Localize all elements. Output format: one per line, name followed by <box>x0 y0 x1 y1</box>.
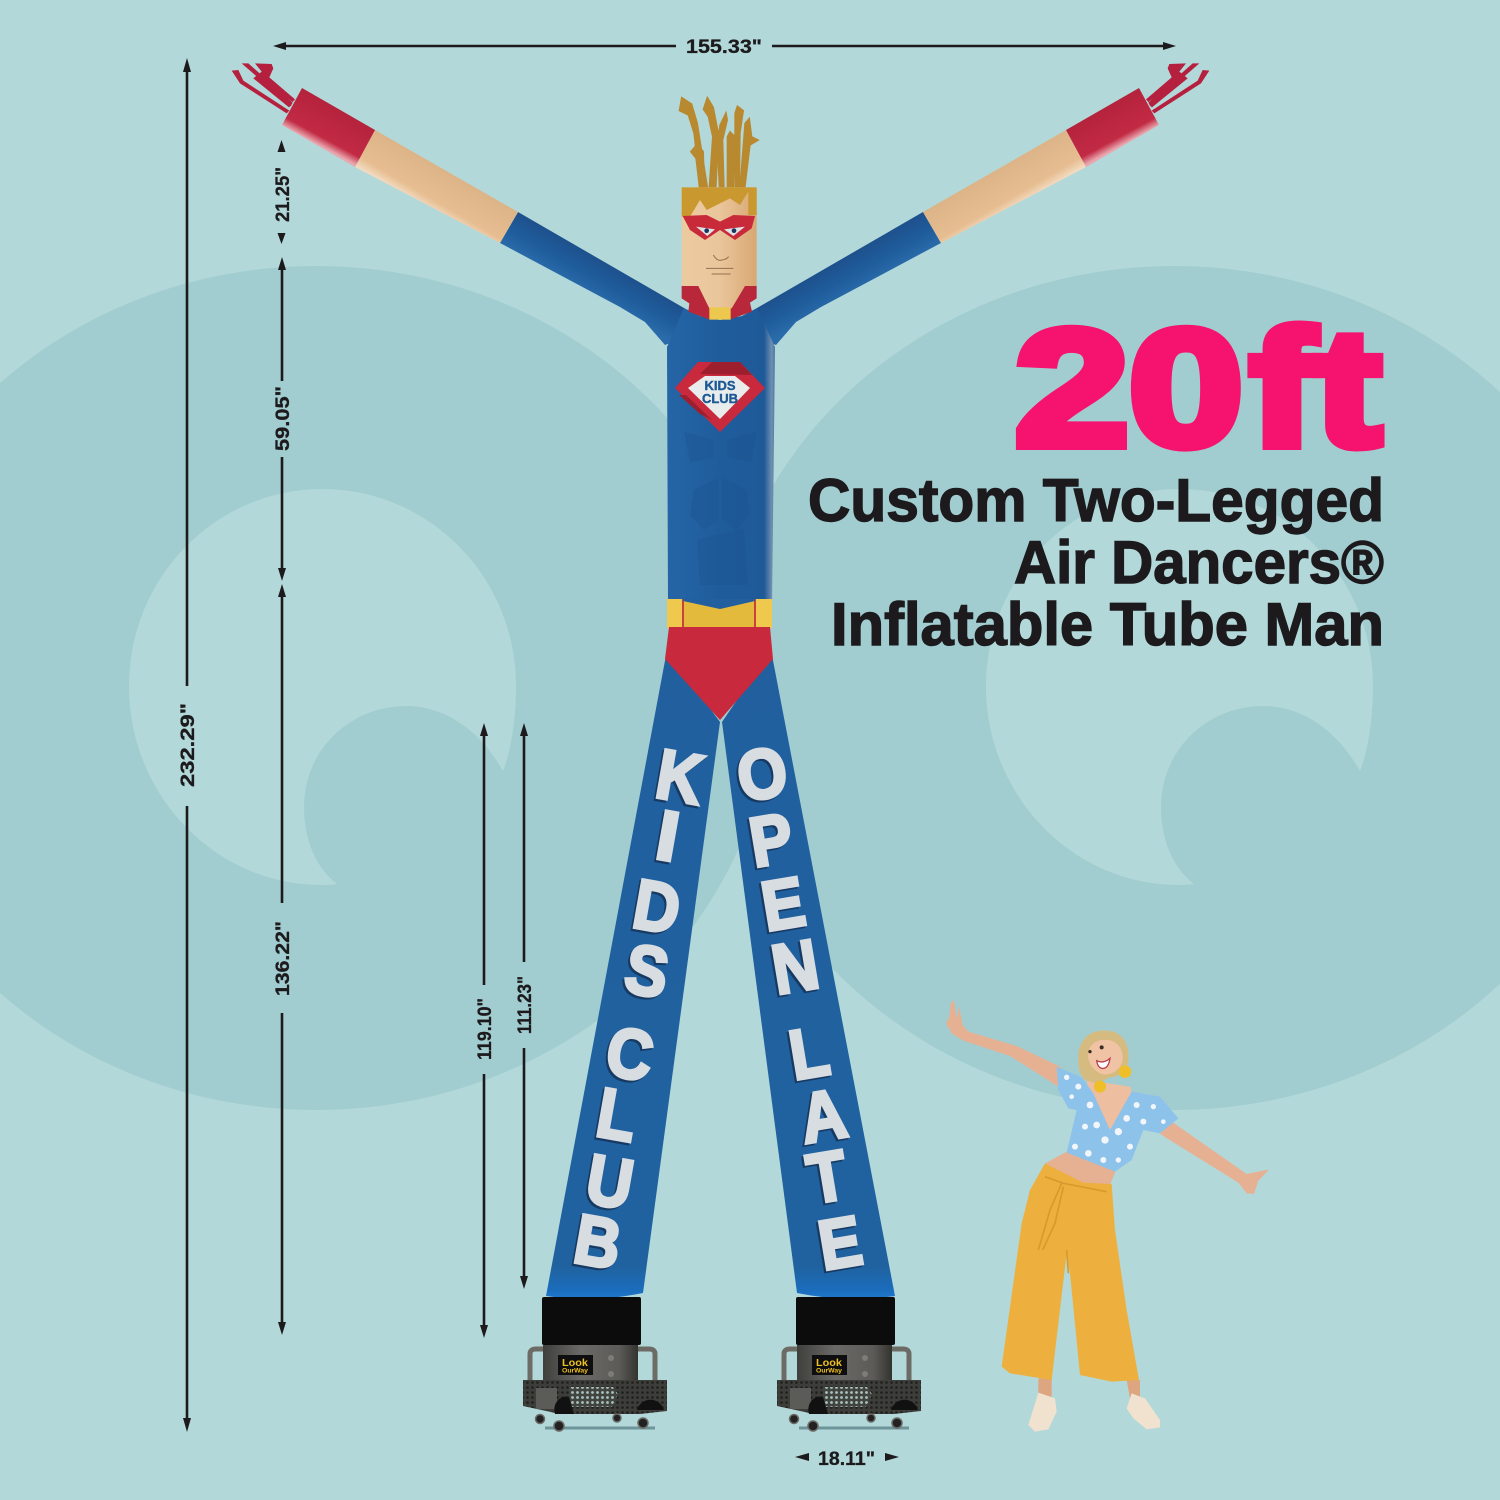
dimension: total height 232.29: 232.29" <box>178 703 199 787</box>
left blower: Look <box>562 1357 588 1369</box>
ankles <box>1038 1378 1140 1398</box>
trousers <box>1002 1163 1139 1382</box>
inflatable tube man <box>232 63 1209 1431</box>
collar yellow <box>709 307 731 320</box>
left blower: OurWay <box>562 1368 588 1374</box>
chest and midriff <box>1087 1080 1133 1133</box>
dimension: total height 232.29 <box>178 58 199 1432</box>
torso muscle shading <box>684 432 757 585</box>
dimension: base width 18.11 <box>795 1449 899 1470</box>
belt <box>667 599 772 628</box>
chest logo: KIDS <box>704 378 736 393</box>
dimension: leg 119.10 <box>475 723 496 1338</box>
dimension: arm 59.05 <box>273 257 294 581</box>
right leg <box>722 650 895 1299</box>
dimension: leg 111.23: 111.23" <box>515 976 536 1034</box>
heading: 20ft: ft <box>1250 296 1381 480</box>
subheading: product name: Inflatable Tube Man <box>831 591 1384 658</box>
right blower: OurWay <box>816 1368 842 1374</box>
woman for scale <box>946 1000 1269 1432</box>
collar <box>682 286 757 319</box>
right blower: Look <box>816 1357 842 1369</box>
hair fringe <box>682 187 757 217</box>
dimension: leg 119.10: 119.10" <box>475 998 496 1060</box>
dimension: body 136.22 <box>273 584 294 1335</box>
hair strands <box>679 97 758 187</box>
dimension: leg 111.23 <box>515 723 536 1289</box>
leg text: OPEN LATE: L <box>784 1012 835 1095</box>
chest logo <box>675 362 765 432</box>
left arm <box>232 63 705 345</box>
right arm <box>736 63 1209 345</box>
leg text: OPEN LATE: N <box>766 926 824 1010</box>
leg text: KIDS CLUB: K <box>651 736 709 820</box>
torso <box>667 308 775 605</box>
leg text: KIDS CLUB: D <box>628 866 686 950</box>
leg text: KIDS CLUB <box>569 736 709 1285</box>
subheading: product name: Air Dancers® <box>1014 529 1384 596</box>
leg text: OPEN LATE: O <box>732 732 793 817</box>
blouse daisies <box>1064 1075 1166 1163</box>
face <box>1088 1040 1123 1074</box>
leg text: OPEN LATE: T <box>802 1136 853 1219</box>
shoes <box>1028 1393 1057 1432</box>
nose and mouth <box>706 255 733 274</box>
dimension: hand 21.25 <box>273 140 294 244</box>
subheading: product name <box>808 467 1384 658</box>
mask <box>683 215 755 240</box>
trouser sash <box>1038 1177 1107 1273</box>
left blower <box>523 1297 667 1431</box>
left leg <box>546 650 720 1299</box>
dimension: arm span 155.33 <box>273 37 1176 58</box>
shorts <box>665 627 773 720</box>
subheading: product name: Custom Two-Legged <box>808 467 1384 534</box>
heading: 20ft: 20 <box>1015 296 1243 480</box>
leg text: OPEN LATE: A <box>794 1075 852 1159</box>
blouse <box>1057 1067 1178 1172</box>
arms <box>946 1000 1062 1087</box>
leg text: OPEN LATE: E <box>813 1202 867 1286</box>
leg text: OPEN LATE <box>732 732 867 1286</box>
leg text: OPEN LATE: P <box>744 799 798 883</box>
leg text: KIDS CLUB: S <box>619 930 674 1014</box>
dimension: base width 18.11: 18.11" <box>818 1449 875 1470</box>
dimension: hand 21.25: 21.25" <box>273 167 294 222</box>
head <box>679 97 758 320</box>
dimension: arm span 155.33: 155.33" <box>686 37 762 58</box>
heading: 20ft <box>1015 296 1381 480</box>
face <box>682 187 757 308</box>
leg text: KIDS CLUB: C <box>601 1013 659 1097</box>
chest logo: CLUB <box>702 391 738 406</box>
leg text: KIDS CLUB: B <box>569 1201 627 1285</box>
background swirl: right <box>717 266 1500 1110</box>
leg text: KIDS CLUB: U <box>581 1141 639 1225</box>
earrings <box>1119 1065 1131 1078</box>
background swirl: left <box>0 266 773 1110</box>
leg text: OPEN LATE: E <box>756 863 810 947</box>
hair <box>1078 1031 1129 1083</box>
right blower <box>777 1297 921 1431</box>
leg text: KIDS CLUB: L <box>591 1074 642 1157</box>
leg text: KIDS CLUB: I <box>650 795 685 876</box>
dimension: arm 59.05: 59.05" <box>273 386 294 451</box>
dimension: body 136.22: 136.22" <box>273 921 294 996</box>
